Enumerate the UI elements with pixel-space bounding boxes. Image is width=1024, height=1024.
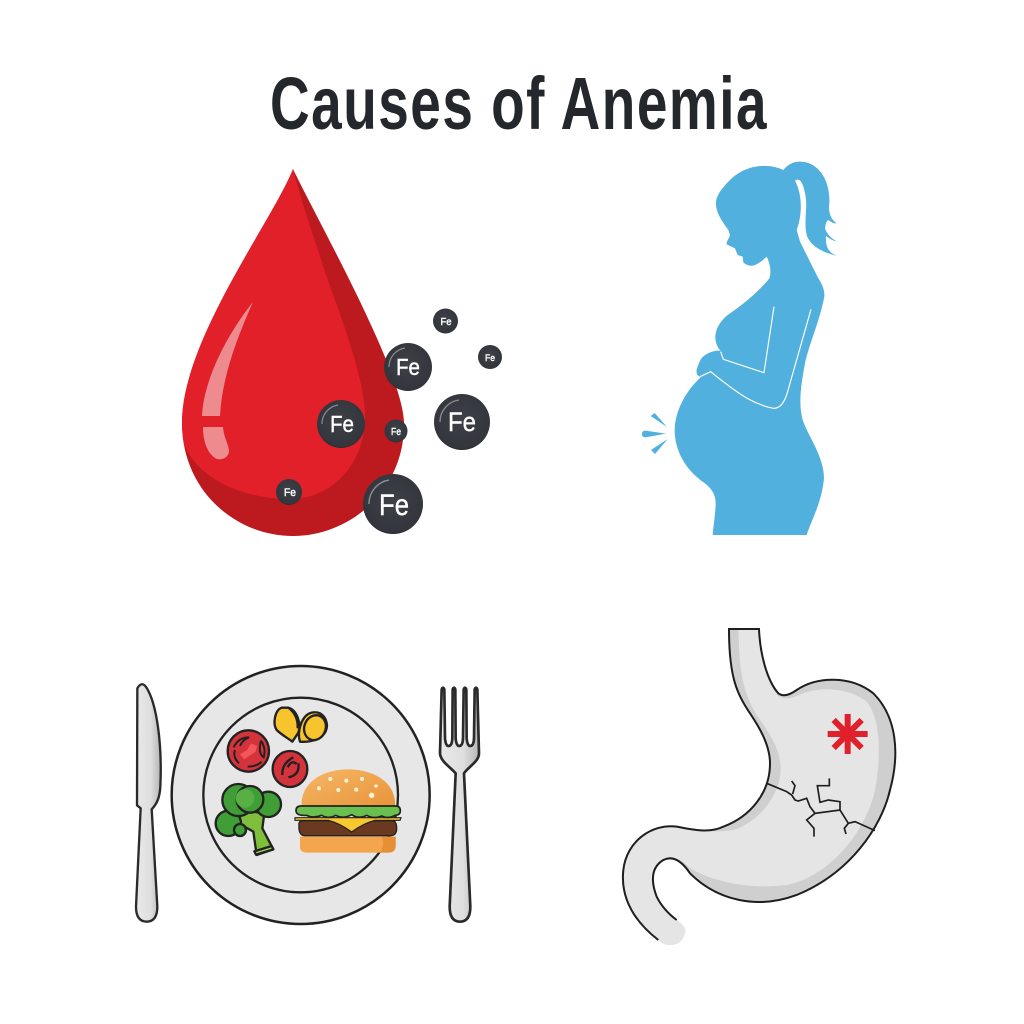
icon: plate [172, 666, 430, 924]
iron particle: drop edge [384, 343, 432, 391]
panel: poor diet place setting [136, 666, 479, 924]
iron particle: on drop centre: Fe [330, 411, 354, 437]
icon: stomach lining cracks [767, 778, 875, 837]
panel: iron deficiency blood drop [182, 169, 502, 536]
icon: knife [136, 684, 161, 922]
iron particle: small centre [384, 420, 408, 442]
iron particle: small lower left [276, 479, 302, 505]
panel: damaged stomach [623, 629, 895, 945]
iron particle: small centre: Fe [391, 427, 401, 438]
icon: pain spark marks [642, 413, 668, 454]
arm outlines [700, 307, 811, 408]
iron particle: large right: Fe [448, 407, 476, 437]
iron particle: small right [478, 345, 502, 369]
iron particle: drop edge: Fe [396, 354, 420, 380]
title: Causes of Anemia [270, 62, 768, 145]
iron particle: small right: Fe [485, 353, 495, 364]
iron particle: large lower: Fe [379, 489, 409, 522]
icon: fork [440, 688, 479, 922]
iron particle: small top [433, 308, 458, 334]
icon: stomach body [623, 629, 895, 945]
food: hamburger [295, 769, 401, 853]
icon: pregnant woman with ponytail [675, 162, 837, 535]
icon: red irritation asterisk [828, 714, 868, 754]
iron particle: small lower left: Fe [284, 487, 296, 499]
food: tomato slice large [228, 730, 269, 772]
iron particle: large right [434, 394, 490, 450]
iron particle: on drop centre [317, 400, 365, 448]
food: yellow potatoes [275, 708, 329, 743]
food: broccoli [216, 784, 281, 855]
icon: blood drop [182, 169, 404, 536]
food: tomato slice small [273, 751, 307, 787]
iron particle: large lower [363, 474, 423, 534]
panel: pregnancy silhouette [642, 162, 837, 535]
iron particle: small top: Fe [440, 317, 452, 328]
